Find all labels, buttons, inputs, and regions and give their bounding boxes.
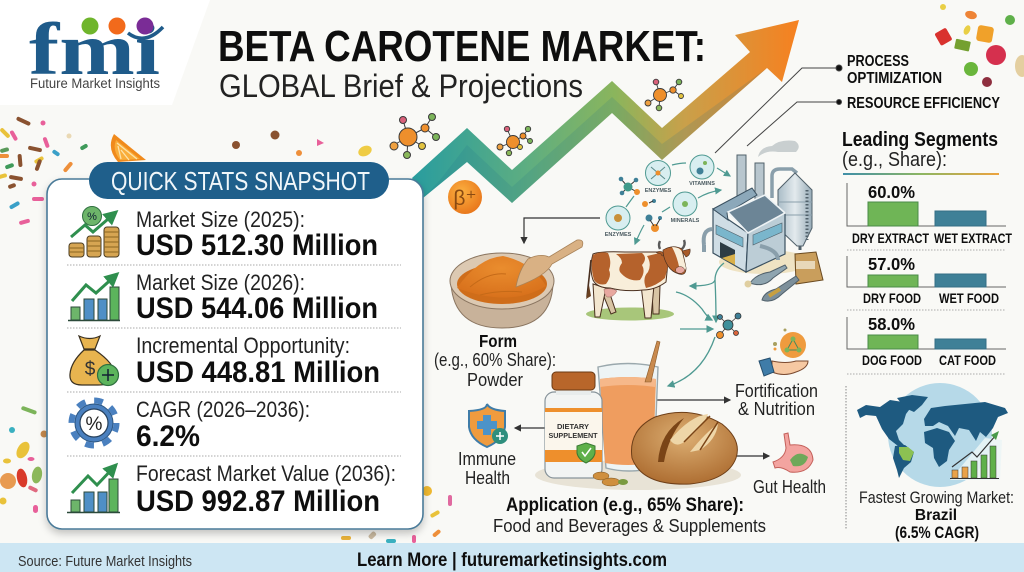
stat: incremental opportunity [136, 333, 380, 389]
label: process optimization: PROCESS [847, 53, 909, 70]
form label: Form [479, 331, 517, 351]
bar chart: food: 57.0% [868, 254, 915, 274]
heading [842, 129, 999, 175]
arrows from products [515, 400, 769, 456]
bar chart: pet food: 58.0% [868, 314, 915, 334]
bar chart: extract: DRY EXTRACT [852, 230, 929, 246]
stat: market size 2025: USD 512.30 Million [136, 229, 378, 262]
bar chart: extract: 60.0% [868, 182, 915, 202]
bar chart: food: DRY FOOD [863, 290, 921, 306]
stat: CAGR [136, 397, 310, 453]
stat: market size 2026: USD 544.06 Million [136, 292, 378, 325]
heading: (e.g., Share): [842, 149, 947, 171]
icon: immune shield [469, 404, 508, 447]
process flow circles: MINERALS [671, 218, 700, 224]
form label: Powder [467, 370, 523, 390]
decorative sprinkles left [0, 116, 452, 543]
logo panel: Future Market Insights [30, 76, 160, 91]
icon: scoop [516, 240, 583, 287]
stat: forecast value [136, 461, 396, 518]
process flow circles [605, 155, 730, 244]
panel: quick stats snapshot [47, 162, 423, 529]
form label [434, 331, 556, 390]
bar chart: food [847, 254, 1006, 306]
icon: bread loaf [631, 412, 737, 484]
icon: beta ball [448, 180, 482, 214]
stat: CAGR: CAGR (2026–2036): [136, 397, 310, 422]
label: process optimization [847, 53, 942, 87]
stat: market size 2025: Market Size (2025): [136, 207, 305, 232]
arrow to bowl [524, 218, 600, 243]
heading: Leading Segments [842, 129, 998, 151]
text: fastest growing: Brazil [915, 507, 957, 524]
application caption: Application (e.g., 65% Share): [506, 495, 744, 516]
icon: cow [586, 240, 690, 320]
icon: dietary supplement bottle: SUPPLEMENT [548, 431, 598, 440]
label: fortification: & Nutrition [738, 399, 815, 419]
form label: (e.g., 60% Share): [434, 350, 556, 370]
icon: fortification hand [759, 328, 808, 376]
molecule center [716, 313, 741, 338]
footer bar [0, 543, 1024, 572]
icon: gear percent: % [86, 414, 103, 435]
bar chart: pet food: CAT FOOD [939, 352, 996, 368]
panel: leading segments [842, 129, 1012, 374]
heading pill [89, 162, 389, 199]
growth arrow [412, 20, 799, 203]
stat: forecast value: Forecast Market Value (2036): [136, 461, 396, 486]
stat: forecast value: USD 992.87 Million [136, 485, 380, 518]
icon: money bag: $ [85, 359, 96, 380]
icon: forecast chart [67, 466, 120, 512]
molecule 3 [645, 79, 684, 111]
application caption: Food and Beverages & Supplements [493, 516, 766, 536]
icon: dietary supplement bottle: DIETARY [557, 422, 589, 431]
icon: dietary supplement bottle [545, 372, 602, 478]
process flow circles: ENZYMES [645, 188, 672, 194]
label: gut health: Gut Health [753, 477, 826, 497]
molecule 2 [497, 126, 532, 156]
icon: world map [857, 383, 1008, 487]
icon: money bag [70, 336, 118, 386]
logo panel [0, 0, 210, 105]
stat: market size 2026 [136, 270, 378, 325]
icon: coins [69, 206, 119, 257]
heading pill: QUICK STATS SNAPSHOT [111, 166, 370, 196]
icon: beta ball: β⁺ [453, 187, 477, 210]
label: fortification [735, 381, 818, 419]
footer bar: Learn More | futuremarketinsights.com [357, 550, 667, 571]
text: fastest growing [859, 488, 1014, 542]
footer bar: Source: Future Market Insights [18, 554, 192, 570]
label: fortification: Fortification [735, 381, 818, 401]
bar chart: food: WET FOOD [939, 290, 999, 306]
icon: smoothie glass [598, 341, 660, 471]
panel: fastest growing market [846, 383, 1014, 542]
stat: CAGR: 6.2% [136, 420, 200, 453]
icon: seeds [593, 472, 628, 486]
icon: powder bowl [450, 240, 583, 328]
process flow circles: VITAMINS [689, 181, 715, 187]
shadow under products [535, 460, 741, 490]
callout lines [715, 65, 842, 153]
label: immune health: Health [465, 468, 510, 488]
bar chart: pet food [847, 314, 1006, 368]
icon: coins: % [87, 211, 97, 223]
stat: market size 2025 [136, 207, 378, 262]
icon: orange slice [111, 134, 146, 162]
stat: market size 2026: Market Size (2026): [136, 270, 305, 295]
text: fastest growing: (6.5% CAGR) [895, 524, 979, 542]
process flow arrows [668, 263, 724, 386]
icon: bar chart up [68, 275, 120, 320]
application caption [493, 495, 766, 536]
molecule 1 [390, 114, 440, 158]
label: process optimization: OPTIMIZATION [847, 70, 942, 87]
process flow circles: ENZYMES [605, 232, 632, 238]
bar chart: pet food: DOG FOOD [862, 352, 922, 368]
icon: gear percent [72, 400, 116, 446]
bar chart: extract [847, 182, 1012, 246]
icon: stomach [773, 433, 813, 472]
logo panel: fmi [29, 9, 160, 91]
stat: incremental opportunity: Incremental Opportunity: [136, 333, 350, 358]
stat: incremental opportunity: USD 448.81 Million [136, 356, 380, 389]
title: BETA CAROTENE MARKET: [218, 22, 706, 71]
icon: factory [704, 141, 823, 301]
subtitle: GLOBAL Brief & Projections [219, 68, 583, 104]
label: immune health [458, 449, 516, 488]
decorative candies top right [934, 4, 1024, 87]
label: immune health: Immune [458, 449, 516, 469]
